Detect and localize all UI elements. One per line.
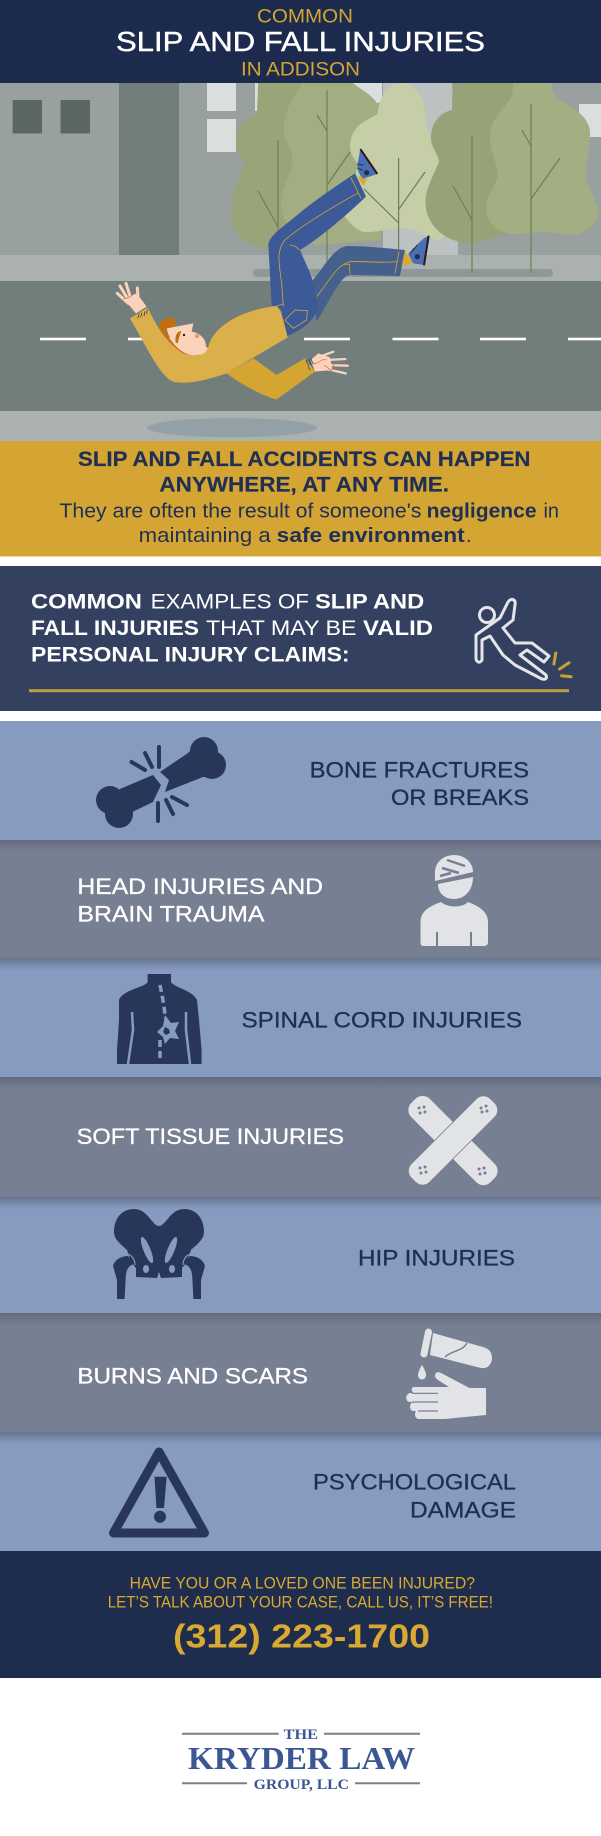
claims heading: THAT MAY BE [206,617,356,640]
label: psychological damage: PSYCHOLOGICAL [313,1469,516,1494]
lower hand [306,352,348,373]
logo: The Kryder Law Group: THE [284,1727,318,1743]
intro heading [78,448,530,497]
intro heading: SLIP AND FALL ACCIDENTS CAN HAPPEN [78,448,530,471]
illustration: man slipping on street [0,83,601,441]
claims heading [31,590,433,667]
label: bone fractures: BONE FRACTURES [310,758,529,783]
label: psychological damage [313,1469,516,1522]
intro body text: negligence [427,500,537,522]
far leg [312,236,429,322]
label: hip: HIP INJURIES [358,1246,515,1271]
intro body text: in [544,500,559,522]
label: psychological damage: DAMAGE [410,1497,516,1522]
call to action text: LET’S TALK ABOUT YOUR CASE, CALL US, IT’S FREE! [108,1593,493,1611]
icon: warning triangle [114,1452,204,1533]
header banner [0,0,601,83]
logo: The Kryder Law Group: GROUP, LLC [254,1777,349,1793]
falling man [117,149,429,399]
label: head injuries [77,874,323,927]
torso and raised arm [130,306,288,383]
intro body text: . [466,525,472,547]
phone number: (312) 223-1700 [173,1617,430,1654]
title: SLIP AND FALL INJURIES [116,26,485,57]
intro body text: They are often the result of someone's [59,500,421,522]
label: head injuries: BRAIN TRAUMA [77,902,265,927]
icon: chemical on hand [406,1332,492,1419]
claims heading: PERSONAL INJURY CLAIMS: [31,644,350,667]
icon: back with injured spine [117,974,202,1064]
intro heading: ANYWHERE, AT ANY TIME. [159,474,449,497]
label: head injuries: HEAD INJURIES AND [77,874,323,899]
injury row: soft tissue [0,1077,601,1197]
claims heading: SLIP AND [315,590,424,613]
raised hand [117,283,147,318]
call to action text: HAVE YOU OR A LOVED ONE BEEN INJURED? [130,1574,475,1592]
logo: The Kryder Law Group: KRYDER LAW [188,1740,415,1776]
logo: The Kryder Law Group [182,1727,420,1793]
injury row: hip [0,1197,601,1313]
injury row: spinal cord [0,958,601,1077]
intro body text [59,500,559,547]
label: burns and scars: BURNS AND SCARS [77,1363,308,1388]
label: bone fractures [310,758,529,810]
icon: pelvis [113,1209,205,1299]
intro panel [0,441,601,556]
claims heading: EXAMPLES OF [151,590,309,613]
injury row: psychological damage [0,1432,601,1551]
label: soft tissue: SOFT TISSUE INJURIES [77,1124,344,1149]
trees [231,83,598,273]
header line: common: COMMON [257,7,353,28]
call to action text [108,1574,493,1611]
near leg [268,149,377,337]
header line: location: IN ADDISON [241,60,360,81]
claims panel [0,566,601,711]
far arm [227,358,315,399]
icon: broken bone [96,737,226,828]
claims heading: FALL INJURIES [31,617,199,640]
footer call to action [0,1551,601,1678]
label: bone fractures: OR BREAKS [391,785,529,810]
injury row: head injuries [0,840,601,958]
label: spinal cord: SPINAL CORD INJURIES [242,1008,522,1033]
icon: slipping figure [476,599,571,679]
injury row: bone fractures [0,721,601,840]
claims heading: VALID [363,617,433,640]
intro body text: maintaining a [139,525,272,547]
injury row: burns and scars [0,1313,601,1432]
icon: crossed bandages [404,1092,502,1189]
claims heading: COMMON [31,590,142,613]
head [159,318,220,356]
icon: bandaged head [420,855,488,946]
intro body text: safe environment [277,525,465,547]
